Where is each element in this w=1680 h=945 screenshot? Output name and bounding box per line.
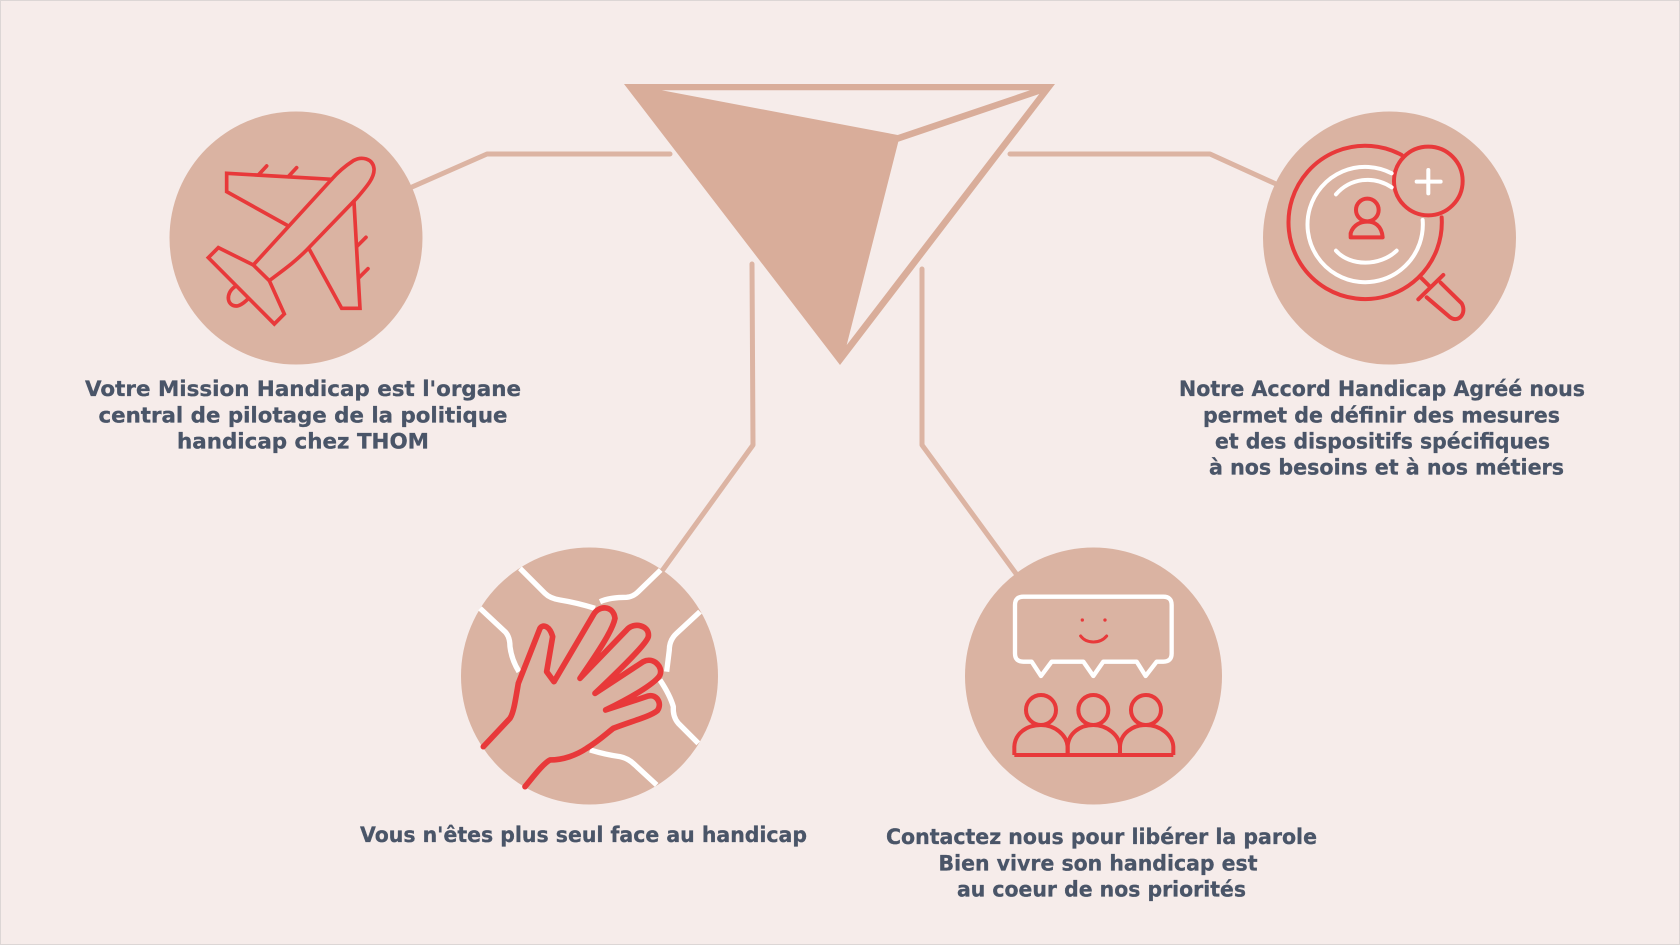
text: accord handicap: permet de définir des mesures xyxy=(1203,404,1560,428)
panel: vous n'êtes plus seul xyxy=(360,548,807,847)
text: accord handicap: Notre Accord Handicap Agréé nous xyxy=(1179,377,1585,401)
panel: mission handicap xyxy=(85,112,521,454)
circle background: plane xyxy=(170,112,422,364)
text: mission handicap: central de pilotage de la politique xyxy=(98,404,508,428)
circle background: magnifier xyxy=(1263,112,1516,364)
icon: hand over puzzle xyxy=(480,568,700,787)
text: contactez nous xyxy=(886,825,1317,902)
panel: accord handicap xyxy=(1179,112,1585,480)
icon: plane xyxy=(208,158,374,324)
text: contactez nous: Bien vivre son handicap est xyxy=(938,852,1258,876)
connector: top left xyxy=(412,154,670,187)
text: contactez nous: au coeur de nos priorités xyxy=(957,878,1246,902)
text: accord handicap: à nos besoins et à nos métiers xyxy=(1209,456,1564,480)
panel: contactez nous xyxy=(886,548,1317,902)
icon: magnifier xyxy=(1288,146,1463,319)
text: accord handicap: et des dispositifs spécifiques xyxy=(1215,430,1550,454)
connector: bottom left xyxy=(662,264,753,571)
icon: audience with speech bubble xyxy=(1014,597,1173,755)
text: accord handicap xyxy=(1179,377,1585,480)
circle background: hand xyxy=(461,548,718,804)
text: mission handicap: handicap chez THOM xyxy=(177,430,429,454)
text: contactez nous: Contactez nous pour libérer la parole xyxy=(886,825,1317,849)
connector: bottom right xyxy=(922,269,1017,575)
central triangle xyxy=(624,84,1055,365)
text: vous n'êtes plus seul: Vous n'êtes plus seul face au handicap xyxy=(360,823,807,847)
text: mission handicap xyxy=(85,377,521,454)
circle background: audience xyxy=(965,548,1222,804)
text: mission handicap: Votre Mission Handicap est l'organe xyxy=(85,377,521,401)
connector: top right xyxy=(1010,154,1276,184)
